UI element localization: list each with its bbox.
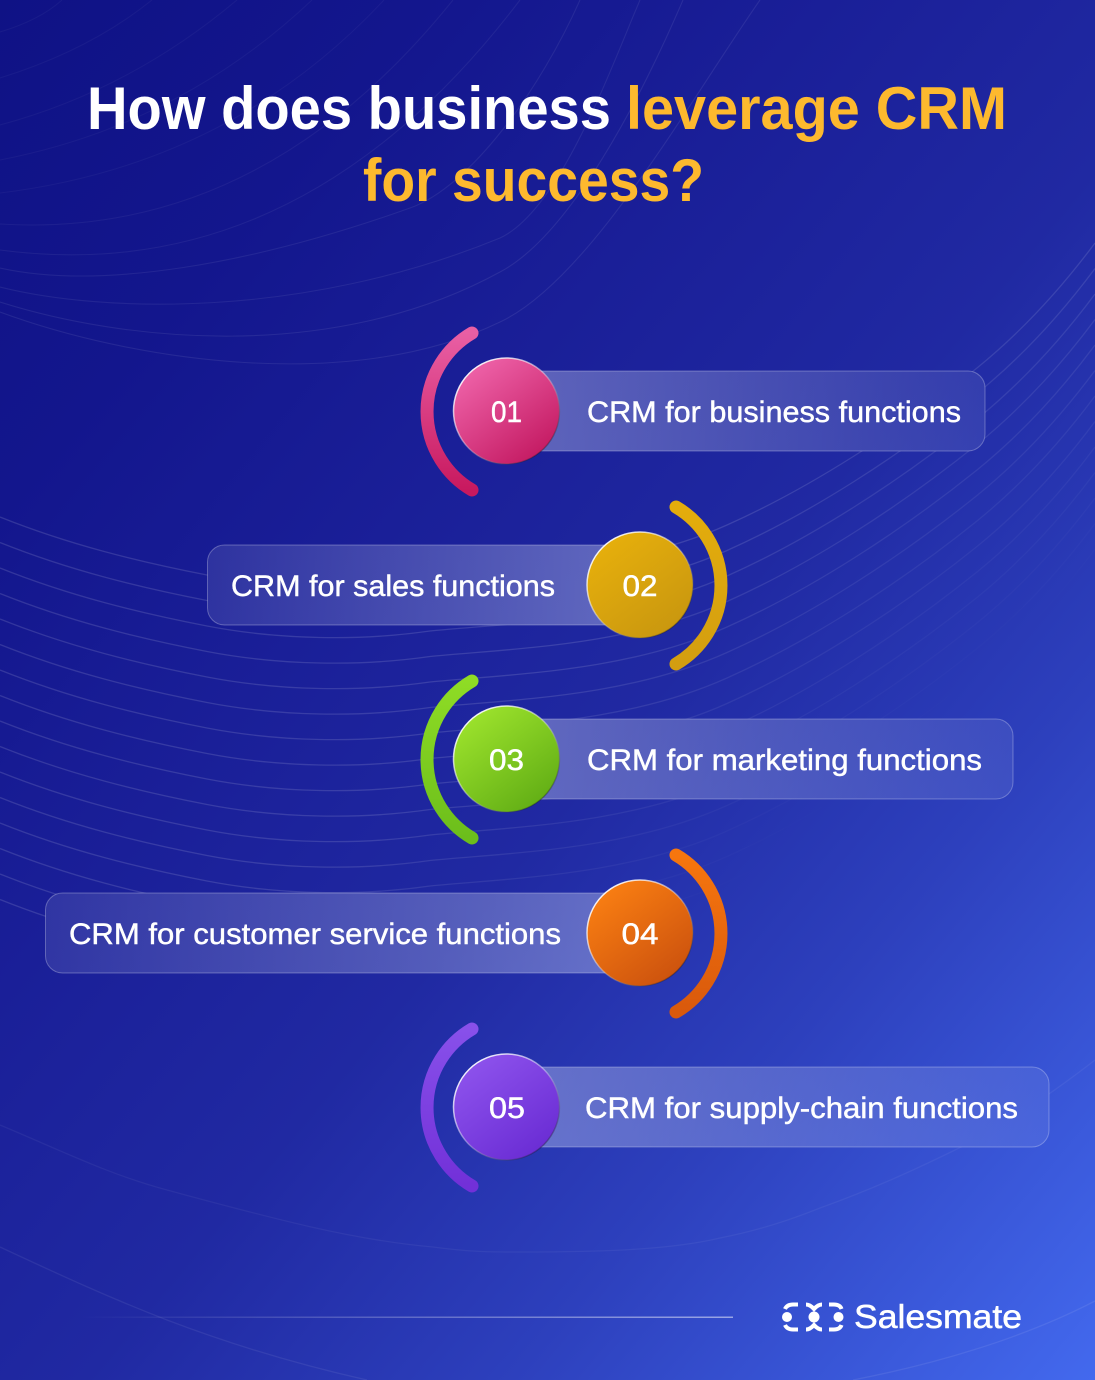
number badge 04 [587, 880, 693, 986]
label bar 01 [520, 371, 985, 451]
icon: linked rings [782, 1304, 844, 1330]
item 01: CRM for business functions [427, 333, 985, 490]
arc 02 [676, 507, 721, 664]
arc 01 [427, 333, 472, 490]
number badge 05: 05 [489, 1092, 525, 1125]
arc 04 [676, 855, 721, 1012]
number badge 02 [587, 532, 693, 638]
label bar 04: CRM for customer service functions [69, 918, 561, 951]
label bar 02: CRM for sales functions [231, 570, 555, 603]
wordmark: Salesmate [854, 1298, 1022, 1335]
number badge 03 [454, 706, 560, 812]
label bar 01: CRM for business functions [587, 396, 961, 429]
label bar 03: CRM for marketing functions [587, 744, 982, 777]
logo: Salesmate [782, 1298, 1022, 1335]
number badge 02: 02 [622, 570, 658, 603]
title: leverage CRM [626, 75, 1007, 142]
item 05: CRM for supply-chain functions [427, 1029, 1049, 1186]
footer rule [80, 1316, 733, 1318]
number badge 01: 01 [491, 396, 522, 429]
title [87, 75, 1007, 214]
label bar 04 [46, 893, 628, 973]
number badge 05 [454, 1054, 560, 1160]
arc 05 [427, 1029, 472, 1186]
number badge 03: 03 [489, 744, 524, 777]
item 03: CRM for marketing functions [427, 681, 1013, 838]
number badge 01 [454, 358, 560, 464]
label bar 05: CRM for supply-chain functions [585, 1092, 1018, 1125]
label bar 03 [520, 719, 1013, 799]
label bar 05 [520, 1067, 1049, 1147]
item 04: CRM for customer service functions [46, 855, 721, 1012]
number badge 04: 04 [622, 918, 658, 951]
arc 03 [427, 681, 472, 838]
item 02: CRM for sales functions [208, 507, 721, 664]
title: for success? [363, 147, 704, 214]
label bar 02 [208, 545, 628, 625]
title: How does business [87, 75, 611, 142]
